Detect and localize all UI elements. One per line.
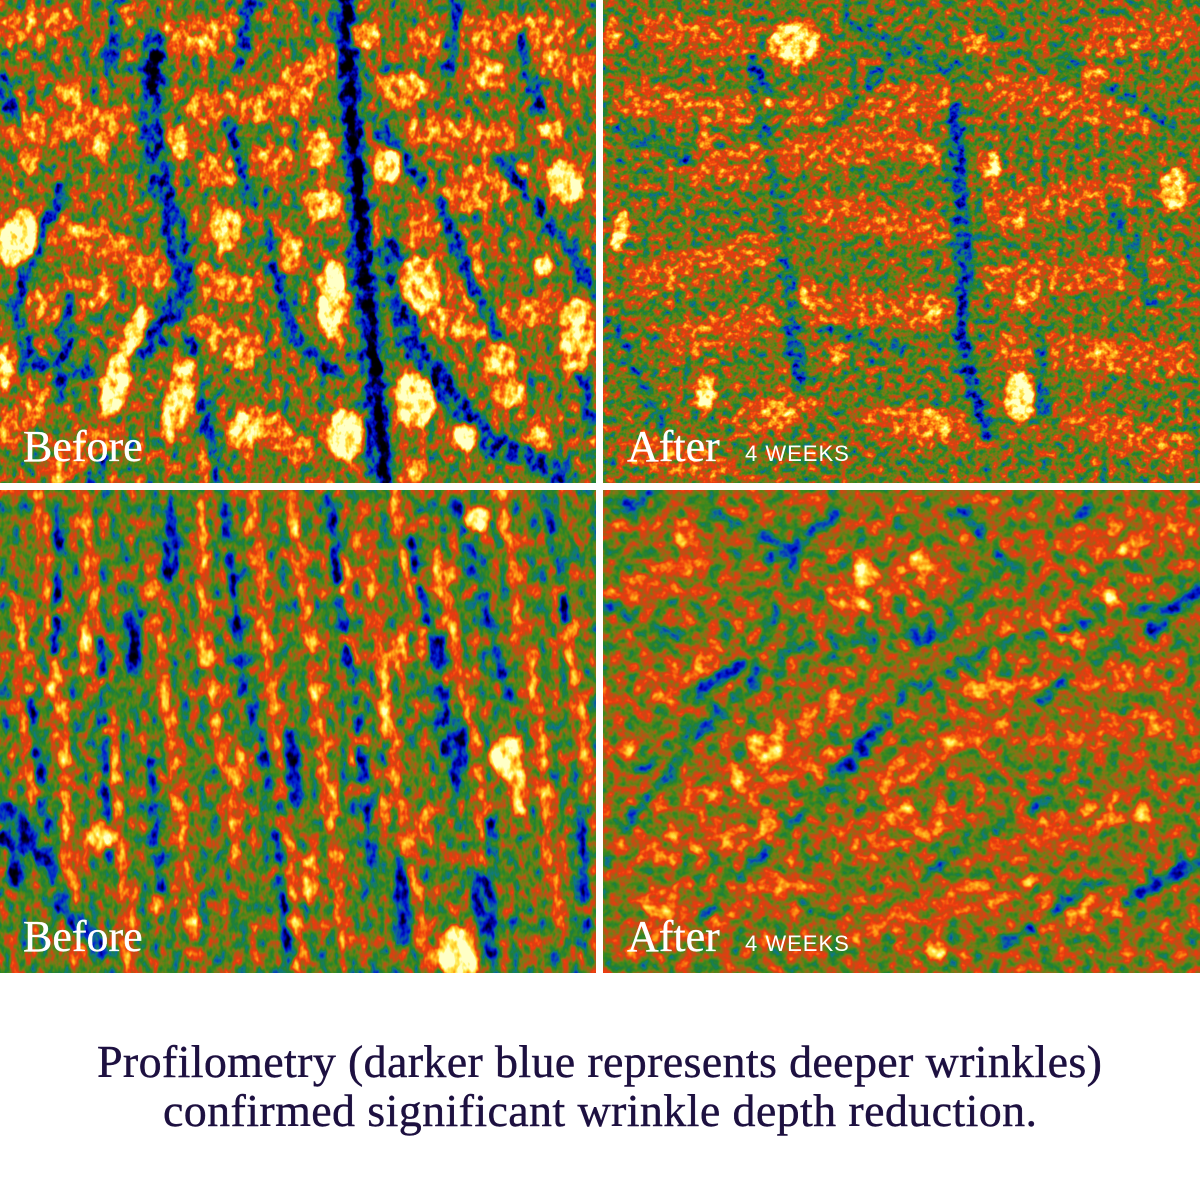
label: after: After — [627, 422, 720, 471]
panel: after 4 weeks, top right — [583, 0, 1200, 503]
caption — [97, 1036, 1102, 1136]
heat map: before 2 — [0, 490, 596, 973]
panel: before, top left — [0, 0, 616, 503]
label: 4 weeks: 4 WEEKS — [745, 441, 850, 466]
label: 4 weeks: 4 WEEKS — [745, 931, 850, 956]
label: before: Before — [23, 422, 143, 471]
heat map: after 2 — [603, 490, 1200, 973]
panel: before, bottom left — [0, 490, 596, 973]
panel: after 4 weeks, bottom right — [603, 490, 1200, 973]
caption: Profilometry (darker blue represents deeper wrinkles) — [97, 1036, 1102, 1087]
label: before: Before — [23, 912, 143, 961]
label: after: After — [627, 912, 720, 961]
heat map: after 1 — [583, 0, 1200, 503]
caption: confirmed significant wrinkle depth reduction. — [163, 1085, 1037, 1136]
heat map: before 1 — [0, 0, 616, 503]
